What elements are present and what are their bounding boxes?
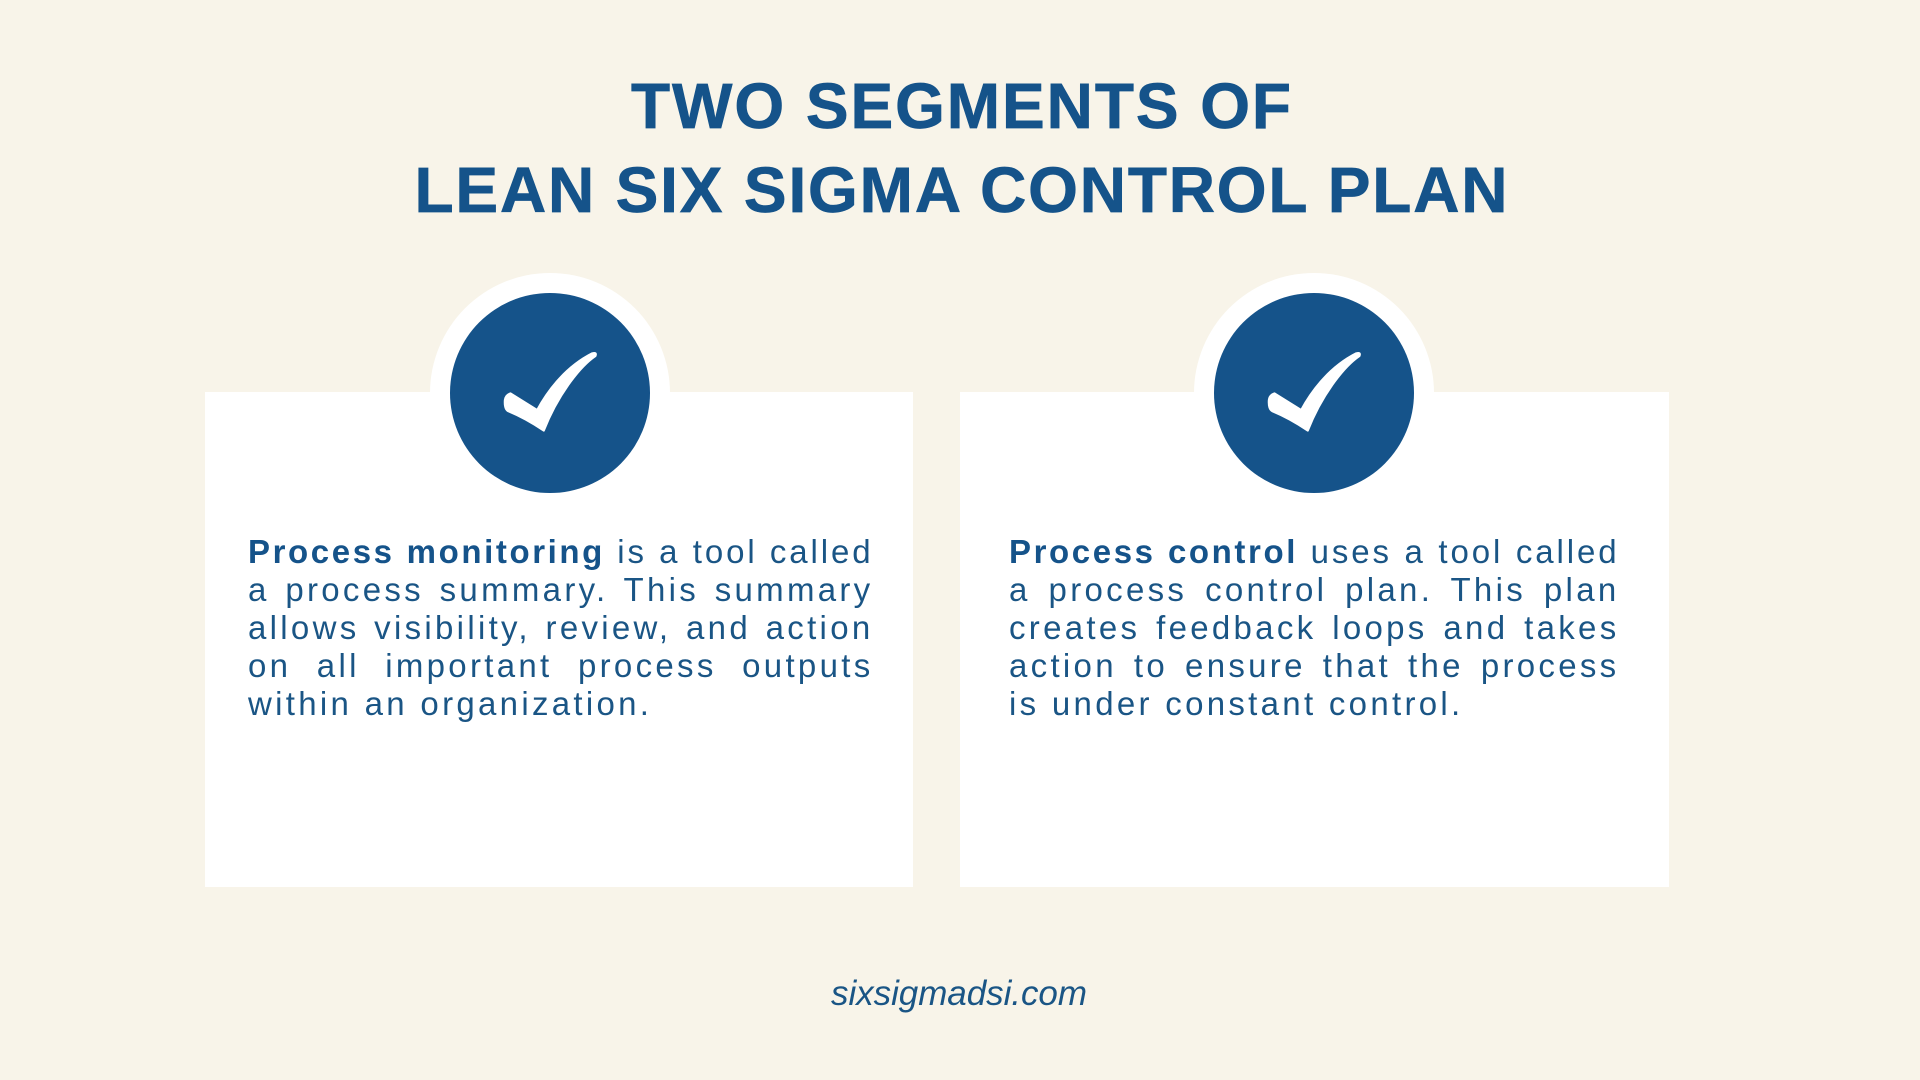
- text block: process control: Process control uses a tool called: [1009, 533, 1620, 570]
- title: LEAN SIX SIGMA CONTROL PLAN: [414, 154, 1508, 226]
- text block: process control: creates feedback loops and takes: [1009, 609, 1620, 646]
- text block: process monitoring: within an organization.: [248, 685, 652, 722]
- panel: process monitoring: [205, 392, 913, 887]
- text block: process monitoring: on all important process outputs: [248, 647, 874, 684]
- panel: process control: [960, 392, 1669, 887]
- text block: process control: action to ensure that the process: [1009, 647, 1620, 684]
- text block: process monitoring: a process summary. This summary: [248, 571, 874, 608]
- footer website: sixsigmadsi.com: [831, 974, 1087, 1013]
- title: TWO SEGMENTS OF: [631, 70, 1291, 142]
- text block: process control: a process control plan. This plan: [1009, 571, 1620, 608]
- text block: process monitoring: Process monitoring is a tool called: [248, 533, 874, 570]
- text block: process control: is under constant control.: [1009, 685, 1464, 722]
- icon: left check mark: [450, 293, 650, 493]
- icon ring: right: [1194, 273, 1434, 513]
- text block: process monitoring: [248, 533, 874, 722]
- text block: process monitoring: allows visibility, review, and action: [248, 609, 874, 646]
- title: [414, 70, 1508, 226]
- icon ring: left: [430, 273, 670, 513]
- text block: process control: [1009, 533, 1620, 722]
- icon: right check mark: [1214, 293, 1414, 493]
